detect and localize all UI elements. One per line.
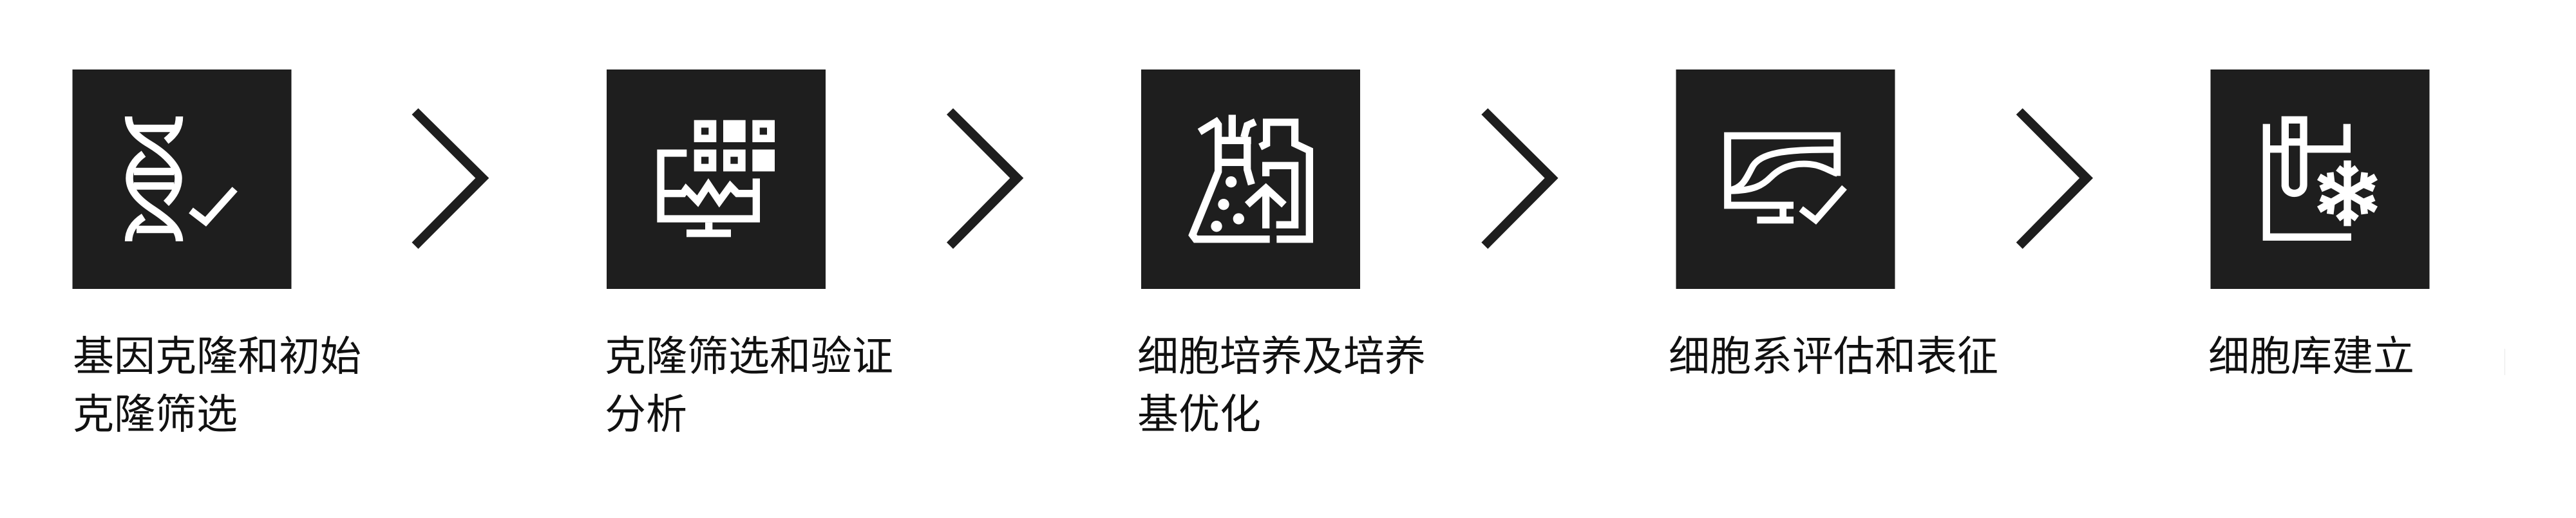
icon box: plate and monitor — [607, 69, 826, 289]
label: step 5: 细胞库建立 — [2208, 333, 2414, 380]
icon box: flask and bottle — [1141, 69, 1360, 289]
label: step 4: 细胞系评估和表征 — [1669, 333, 1998, 380]
step 5: cell banking — [2208, 69, 2429, 380]
step 2: clone screening — [605, 69, 893, 438]
arrow 1 — [412, 108, 489, 249]
label: step 1: 基因克隆和初始 — [73, 333, 361, 380]
label: step 1: 克隆筛选 — [73, 391, 238, 438]
step 1: gene cloning — [72, 69, 361, 438]
icon box: monitor with growth curves — [1676, 69, 1895, 289]
arrow 4 — [2016, 108, 2093, 249]
label: step 3: 基优化 — [1137, 391, 1261, 438]
arrow 2 — [947, 108, 1023, 249]
step 3: cell culture — [1137, 69, 1426, 438]
arrow 3 — [1481, 108, 1558, 249]
icon box: DNA with check — [72, 69, 291, 289]
label: step 2: 克隆筛选和验证 — [605, 333, 893, 380]
icon box: tube rack with snowflake — [2210, 69, 2429, 289]
step 4: cell line evaluation — [1669, 69, 1998, 380]
label: step 3: 细胞培养及培养 — [1137, 333, 1426, 380]
label: step 2: 分析 — [605, 391, 687, 438]
